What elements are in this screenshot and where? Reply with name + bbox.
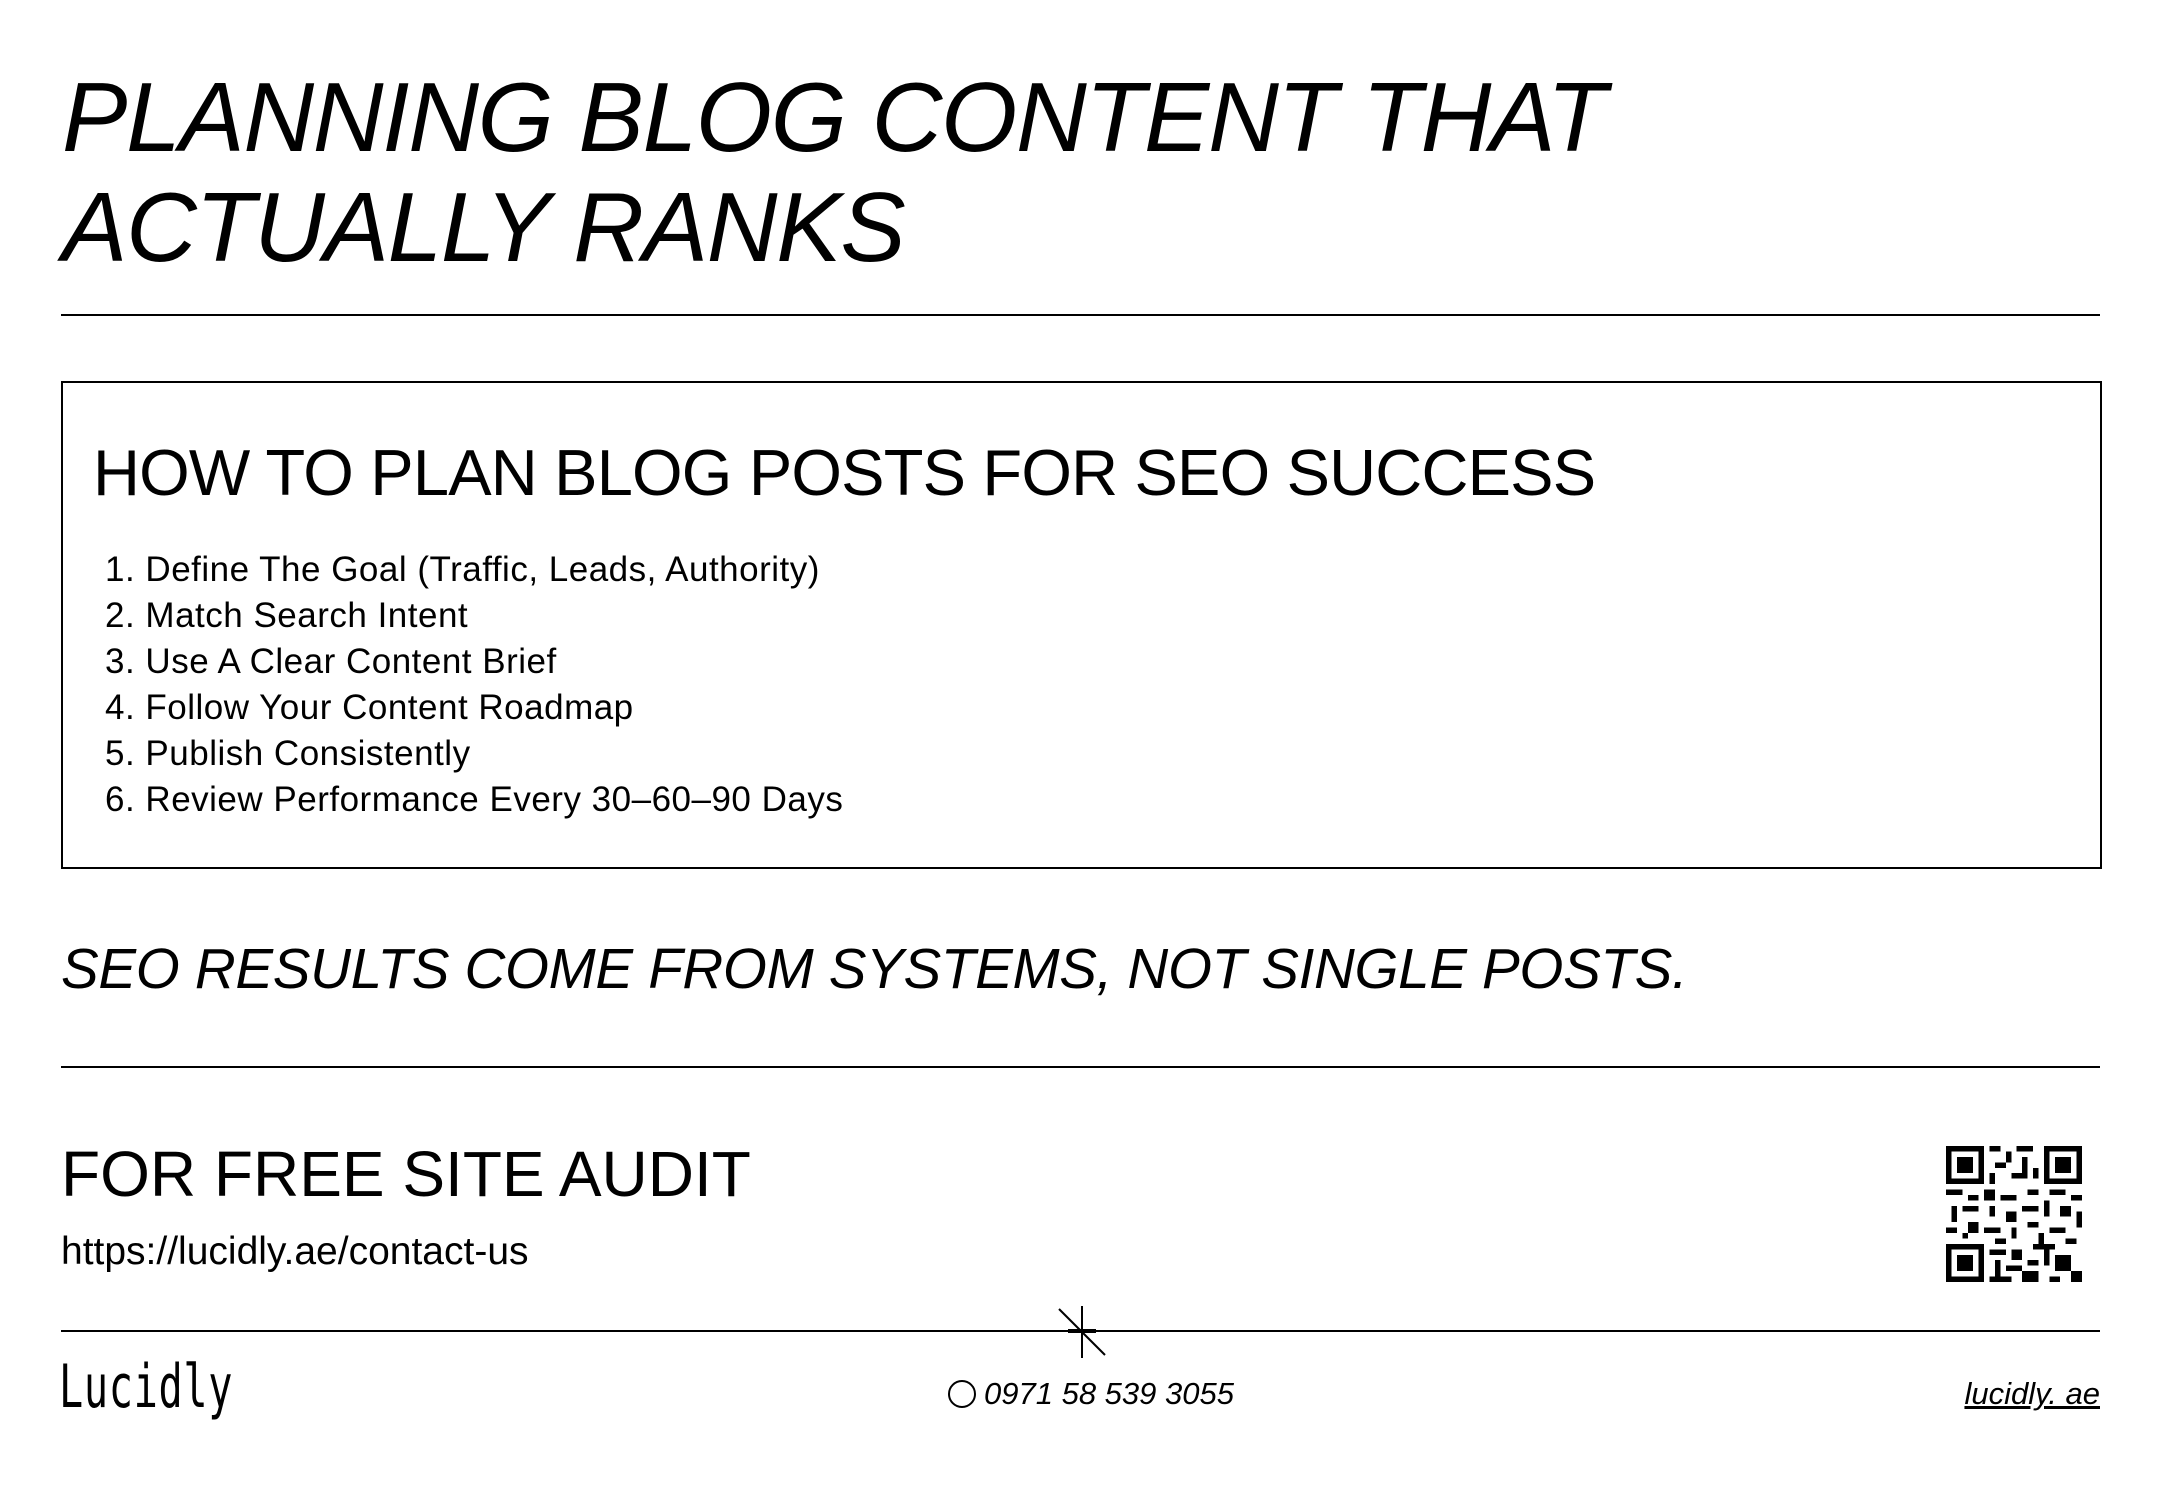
steps list: 4. Follow Your Content Roadmap: [105, 688, 634, 727]
steps list: 2. Match Search Intent: [105, 596, 468, 635]
title: [57, 62, 1612, 282]
steps list: 6. Review Performance Every 30–60–90 Days: [105, 780, 843, 819]
steps list: [105, 550, 843, 819]
cta heading: FOR FREE SITE AUDIT: [61, 1138, 751, 1210]
logo: Lucidly: [59, 1352, 233, 1422]
steps list: 5. Publish Consistently: [105, 734, 471, 773]
steps list: 1. Define The Goal (Traffic, Leads, Authority): [105, 550, 820, 589]
icon: qr code: [1946, 1146, 2082, 1282]
icon: sparkle star: [1058, 1306, 1106, 1358]
title: ACTUALLY RANKS: [62, 172, 904, 282]
tagline: SEO RESULTS COME FROM SYSTEMS, NOT SINGLE POSTS.: [61, 937, 1687, 1000]
title: PLANNING BLOG CONTENT THAT: [62, 62, 1605, 172]
website link: lucidly. ae: [1964, 1376, 2100, 1411]
panel heading: HOW TO PLAN BLOG POSTS FOR SEO SUCCESS: [93, 436, 1595, 509]
phone contact: 0971 58 539 3055: [984, 1376, 1234, 1411]
cta url: https://lucidly.ae/contact-us: [61, 1230, 529, 1273]
panel: steps: [61, 381, 2102, 869]
steps list: 3. Use A Clear Content Brief: [105, 642, 557, 681]
